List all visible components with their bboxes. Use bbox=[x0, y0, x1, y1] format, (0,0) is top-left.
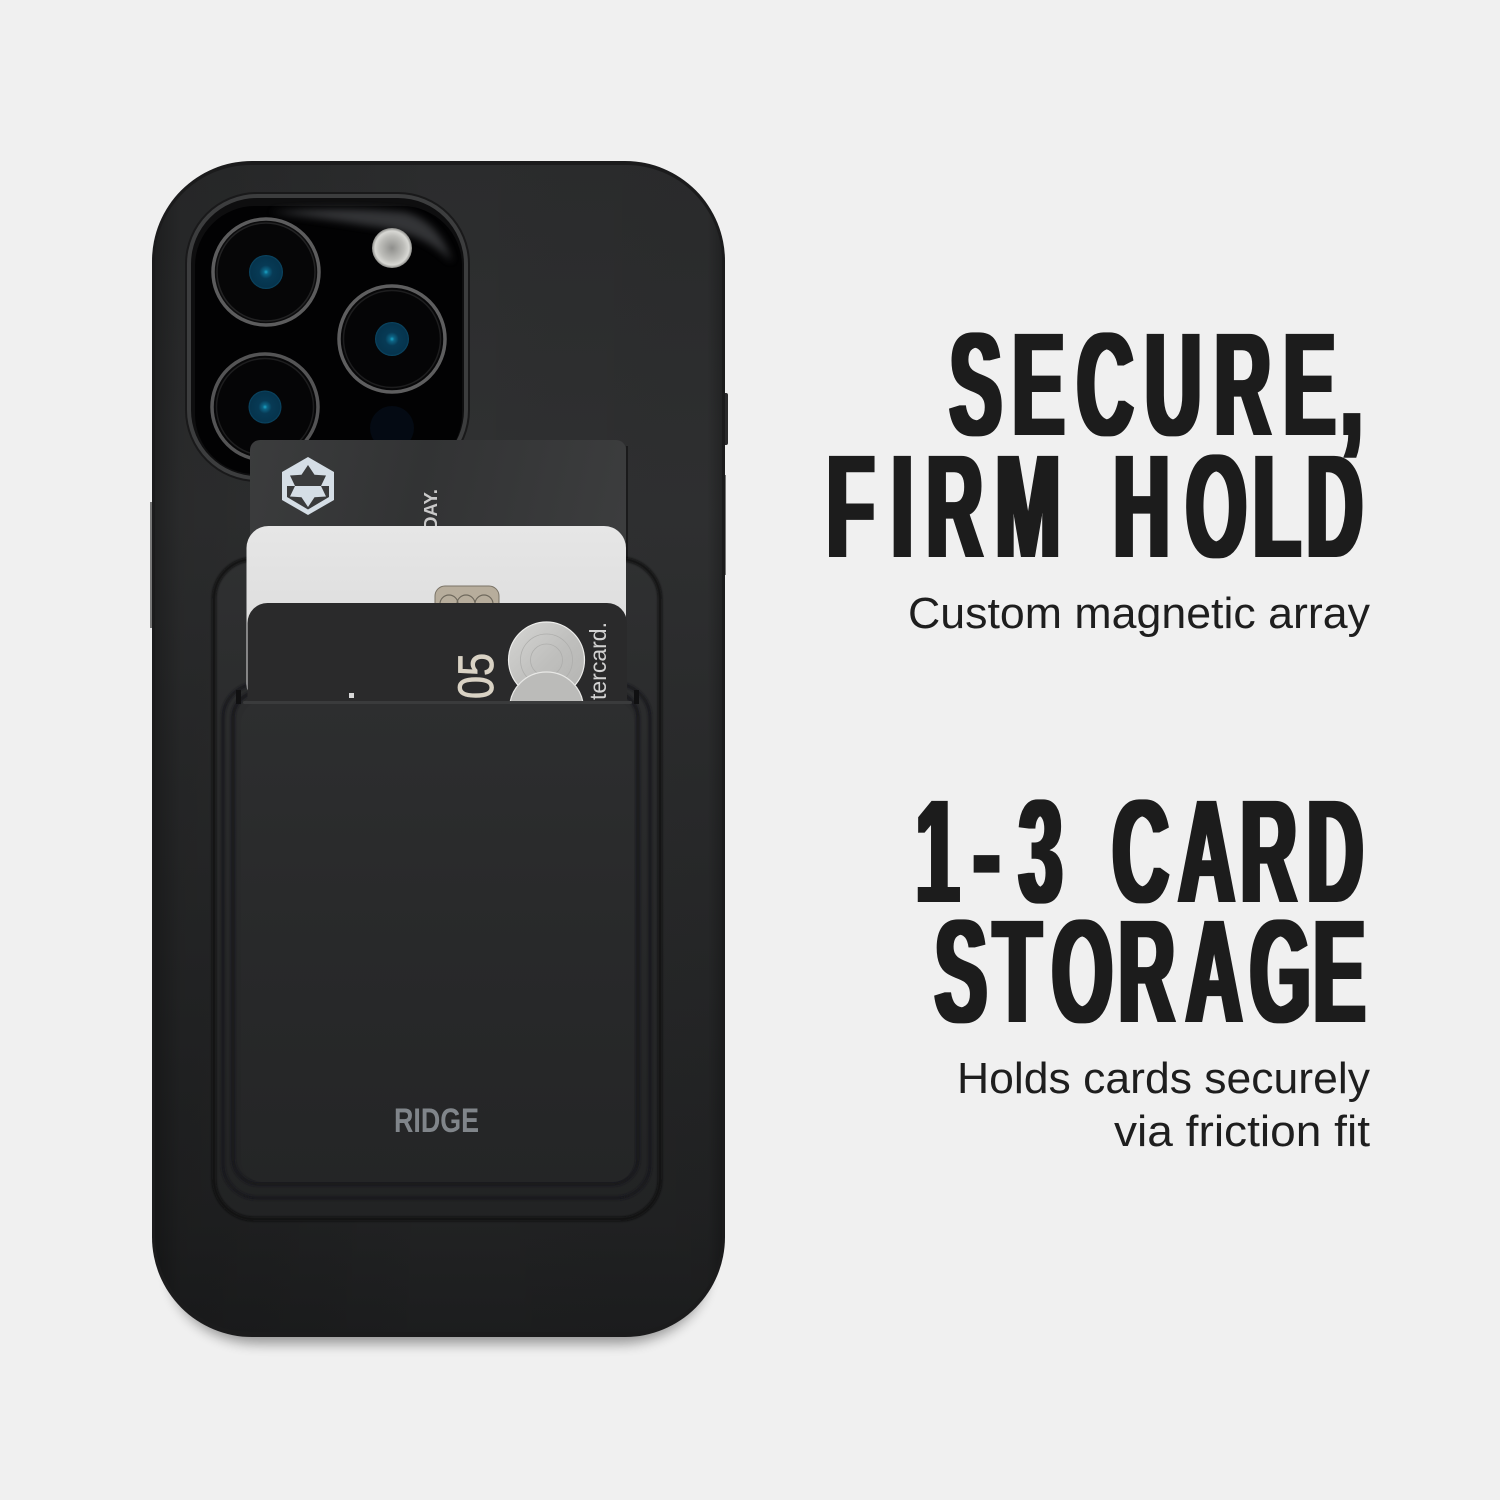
card text: DAY. bbox=[421, 489, 441, 530]
phone shadow bbox=[170, 1200, 708, 1344]
card logo bbox=[282, 457, 334, 515]
wallet front pocket bbox=[236, 690, 639, 1182]
card brand text: tercard. bbox=[585, 622, 611, 700]
heading: 1-3 card storage bbox=[916, 770, 1365, 1053]
flash bbox=[372, 228, 412, 268]
phone with wallet bbox=[150, 161, 728, 1344]
subtext: custom magnetic array: Custom magnetic array bbox=[908, 589, 1370, 638]
heading: secure, firm hold: FIRM HOLD bbox=[827, 425, 1363, 588]
card: white bbox=[246, 526, 626, 706]
side buttons bbox=[150, 393, 728, 628]
lens: right bbox=[339, 286, 445, 392]
wallet back plate bbox=[214, 559, 660, 1219]
heading: secure, firm hold: SECURE, bbox=[950, 303, 1363, 466]
lens: lower bbox=[212, 354, 318, 460]
mastercard logo bbox=[508, 621, 586, 701]
infographic canvas bbox=[150, 161, 1370, 1352]
phone body bbox=[152, 161, 725, 1337]
card: black top card bbox=[250, 440, 628, 560]
camera module bbox=[185, 192, 470, 482]
cards in slot bbox=[246, 526, 627, 701]
card chip bbox=[434, 586, 500, 603]
subtext: holds cards securely: via friction fit bbox=[1114, 1107, 1370, 1156]
heading: 1-3 card storage: 1-3 CARD bbox=[916, 770, 1363, 933]
heading: 1-3 card storage: STORAGE bbox=[935, 890, 1365, 1053]
lens: main bbox=[213, 219, 319, 325]
subtext: holds cards securely: Holds cards securely bbox=[957, 1054, 1370, 1103]
card: dark front bbox=[248, 603, 627, 701]
brand mark: RIDGE bbox=[394, 1102, 479, 1140]
card number: 05 bbox=[448, 653, 504, 699]
wallet side rails bbox=[223, 684, 650, 1198]
subtext: holds cards securely bbox=[957, 1054, 1370, 1156]
heading: secure, firm hold bbox=[827, 303, 1363, 588]
